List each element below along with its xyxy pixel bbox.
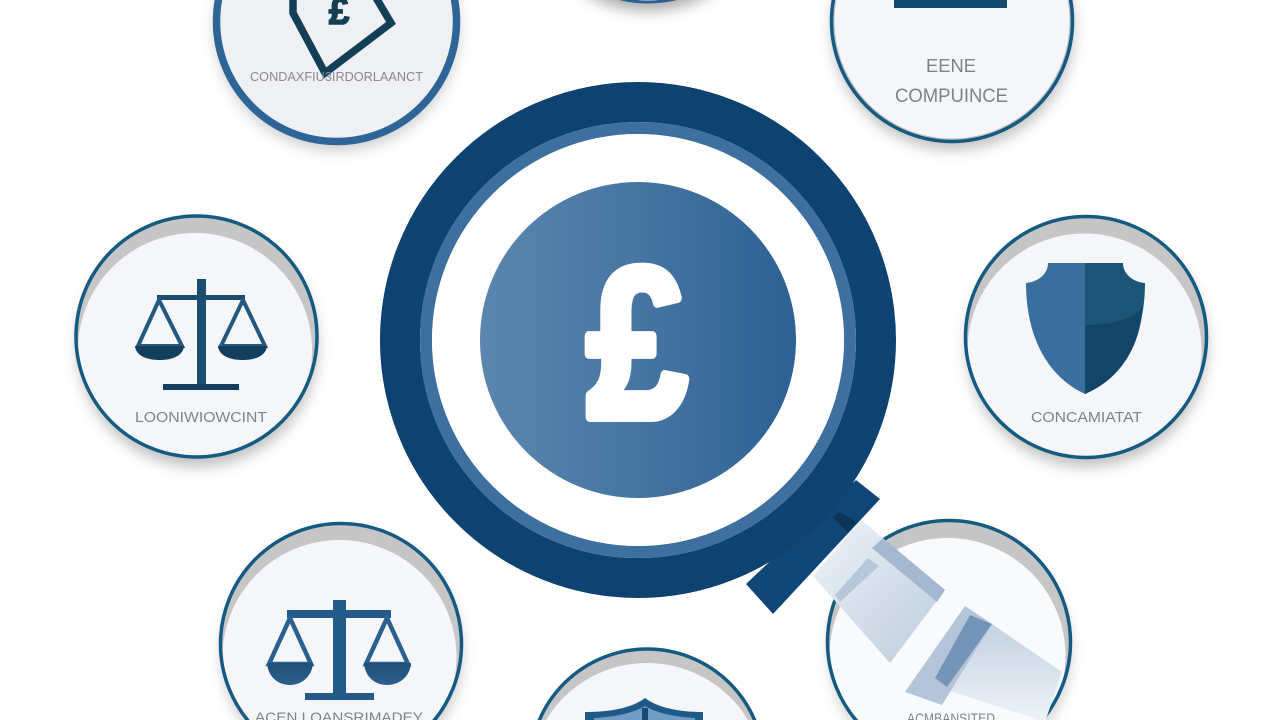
lens (432, 134, 844, 546)
label: EENE (926, 56, 976, 76)
badge: bottom left scales (220, 524, 462, 720)
icon: scales of justice (267, 600, 411, 700)
collar shadow (832, 512, 857, 532)
icon: document base (894, 0, 1007, 8)
icon: price tag with pound sign (293, 0, 391, 73)
label: LOONIWIOWCINT (135, 409, 267, 426)
handle collar (746, 480, 880, 614)
label: CONDAXFIU3IRDORLAANCT (250, 69, 423, 84)
magnifying glass (400, 102, 1062, 720)
badge: top left compliance tag (215, 0, 459, 151)
outer ring (400, 102, 876, 578)
badge: top right compliance (832, 0, 1074, 150)
glass handle: translucent sections (813, 520, 1062, 720)
inner ring highlight (426, 128, 850, 552)
icon: scales of justice (135, 279, 267, 390)
badge: left scales (76, 216, 318, 467)
icon: shield top (585, 698, 703, 720)
label: CONCAMIATAT (1031, 409, 1142, 426)
icon: shield (1026, 263, 1145, 394)
badge: right shield (966, 216, 1207, 468)
central disc (480, 182, 796, 498)
badge: top centre (cropped) (526, 0, 770, 11)
badge: bottom right (828, 520, 1070, 720)
badge: top right compliance: COMPUINCE (895, 86, 1008, 107)
badge: bottom centre shield (cropped) (529, 649, 765, 720)
icon: pound sign: £ (587, 224, 687, 463)
